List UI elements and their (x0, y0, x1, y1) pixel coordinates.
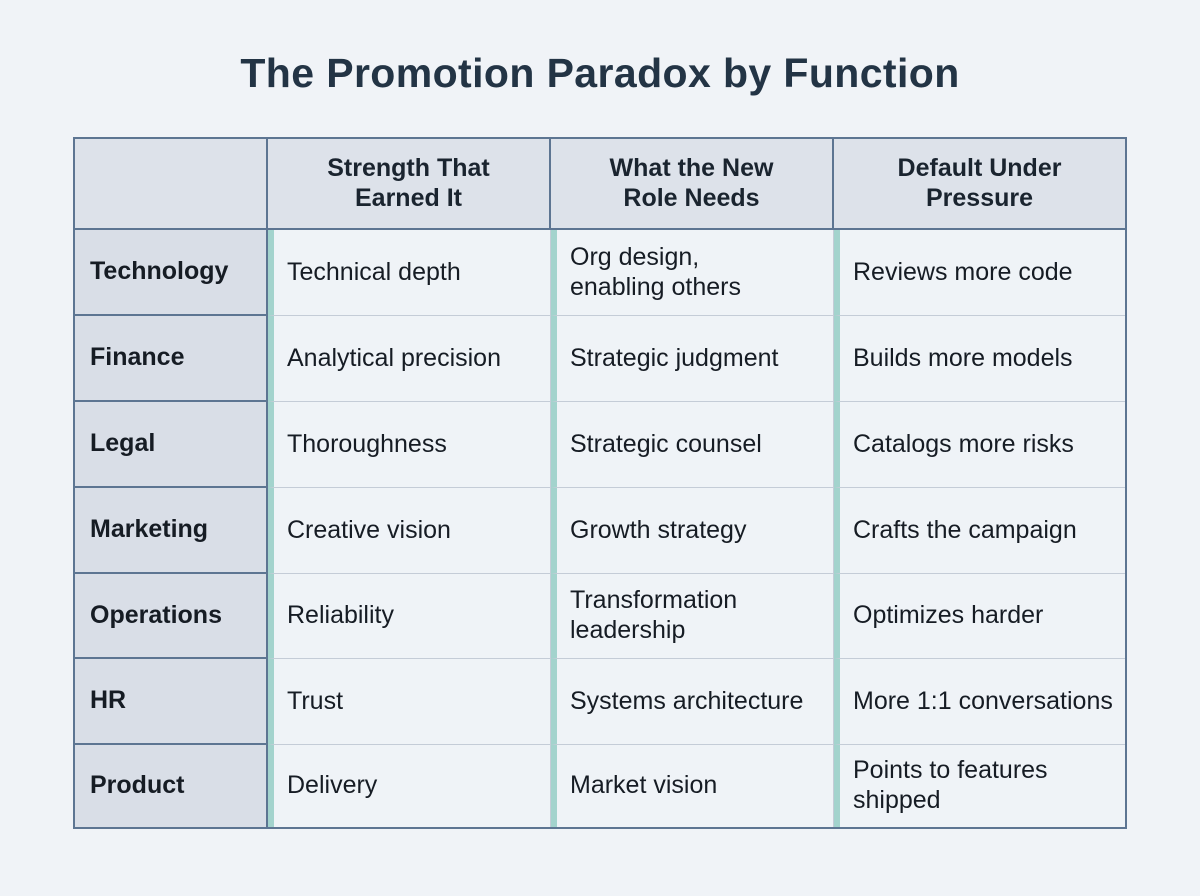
table: Technical depth (287, 258, 461, 286)
header row (75, 139, 268, 230)
row: Technology (75, 230, 268, 316)
table: Systems architecture (570, 686, 803, 714)
table: Transformation (570, 586, 737, 614)
row: Technology: Technology (90, 257, 228, 285)
table: shipped (853, 786, 941, 814)
table: Org design, (570, 242, 699, 270)
row: HR (75, 659, 268, 745)
table: Reviews more code (853, 258, 1073, 286)
header: default (834, 139, 1125, 230)
row: Product (75, 745, 268, 827)
table: Reliability (287, 601, 394, 629)
table: Trust (287, 686, 343, 714)
row: HR: HR (90, 686, 126, 714)
table: Analytical precision (287, 344, 501, 372)
row: Legal: Legal (90, 429, 155, 457)
header: new role: What the New (610, 154, 773, 182)
header: new role (551, 139, 834, 230)
row: Product: Product (90, 771, 184, 799)
row: Operations: Operations (90, 600, 222, 628)
header: strength (268, 139, 551, 230)
row: Finance: Finance (90, 343, 184, 371)
table: Catalogs more risks (853, 430, 1074, 458)
table: Growth strategy (570, 516, 746, 544)
table: Optimizes harder (853, 601, 1043, 629)
table: Market vision (570, 771, 717, 799)
row: Operations (75, 574, 268, 659)
header: strength: Earned It (355, 184, 462, 212)
table: More 1:1 conversations (853, 686, 1113, 714)
table: Builds more models (853, 344, 1073, 372)
table: Crafts the campaign (853, 516, 1077, 544)
table: Delivery (287, 771, 377, 799)
header: strength: Strength That (327, 154, 490, 182)
table: enabling others (570, 272, 741, 300)
row: Finance (75, 316, 268, 402)
row: Marketing: Marketing (90, 515, 208, 543)
table: Creative vision (287, 516, 451, 544)
table: Thoroughness (287, 430, 447, 458)
table (73, 137, 1127, 829)
table: Strategic counsel (570, 430, 762, 458)
row: Marketing (75, 488, 268, 574)
table: leadership (570, 616, 685, 644)
header: new role: Role Needs (623, 184, 760, 212)
table: Points to features (853, 756, 1048, 784)
table: Strategic judgment (570, 344, 778, 372)
header: default: Default Under (898, 154, 1061, 182)
row: Legal (75, 402, 268, 488)
header: default: Pressure (926, 184, 1033, 212)
title: The Promotion Paradox by Function (240, 50, 960, 96)
